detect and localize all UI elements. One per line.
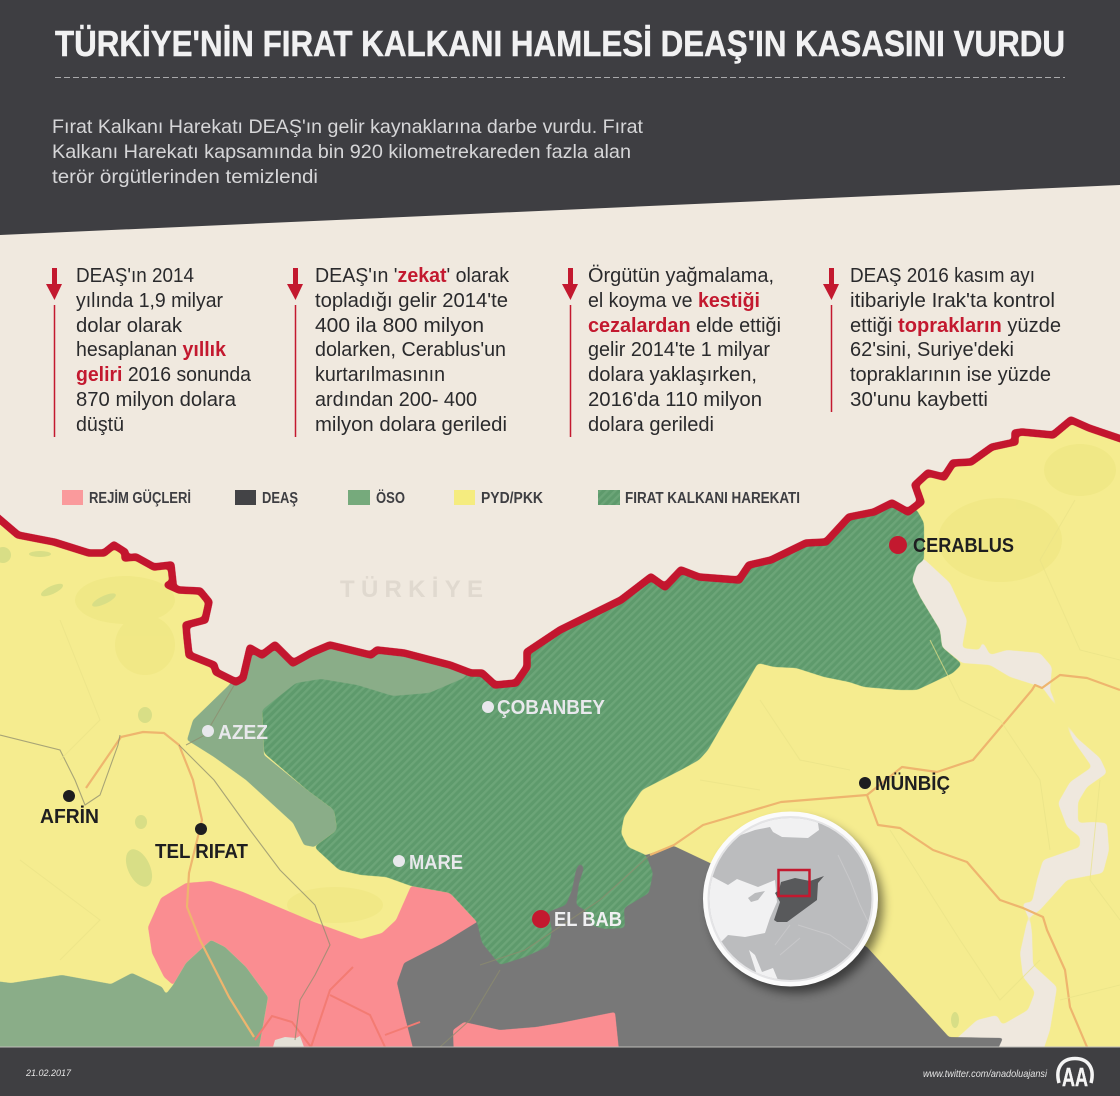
region: regime forces pink, south [453,1012,620,1060]
label: Türkiye: TÜRKİYE [340,576,483,603]
borders [775,855,868,955]
text block: itibariyle Irak'ta kontrol [850,290,1055,312]
text block [76,265,252,436]
city: El Bab: EL BAB [554,909,622,931]
text block: dolara geriledi [588,414,714,436]
intro text: terör örgütlerinden temizlendi [52,166,318,188]
text block: el koyma ve kestiği [588,290,760,312]
terrain tints [75,444,1116,923]
roads [86,675,1120,1047]
text block: cezalardan elde ettiği [588,315,781,337]
intro text: Fırat Kalkanı Harekatı DEAŞ'ın gelir kaynaklarına darbe vurdu. Fırat [52,116,644,138]
source url: www.twitter.com/anadoluajansi [923,1068,1048,1080]
road inside regime area [255,967,420,1047]
column 1: annual income [46,265,252,437]
text block: Örgütün yağmalama, [588,265,774,287]
text block: hesaplanan yıllık [76,339,227,361]
intro text [52,116,644,188]
legend: ÖSO: ÖSO [376,488,405,507]
region: Euphrates Shield hatched [262,498,962,965]
Syria-Türkiye border [0,420,1120,685]
column 2: zekat [287,265,510,437]
city: Afrin [40,790,99,828]
Black Sea [741,818,819,838]
legend: DEAŞ [235,490,298,507]
text block: dolar olarak [76,315,183,337]
text block: topladığı gelir 2014'te [315,290,508,312]
text block: 2016'da 110 milyon [588,389,762,411]
map: territory control [0,420,1120,1060]
logo: Anadolu Agency: AA [1062,1062,1088,1092]
icon: down arrow [823,268,839,300]
city: Afrin: AFRİN [40,805,99,828]
text block [850,265,1061,411]
Mediterranean Sea [710,877,777,941]
city: Mare: MARE [409,852,463,874]
text block: yılında 1,9 milyar [76,290,223,312]
text block: kurtarılmasının [315,364,445,386]
faint local roads [20,500,1120,1000]
text block: 870 milyon dolara [76,389,237,411]
text block: DEAŞ 2016 kasım ayı [850,265,1035,287]
text block: gelir 2014'te 1 milyar [588,339,770,361]
city: Tel Rifat [155,823,248,863]
legend: regime forces [62,488,191,507]
text block: düştü [76,414,124,436]
text block: dolara yaklaşırken, [588,364,757,386]
text block: 400 ila 800 milyon [315,315,484,337]
vegetation patches [0,547,959,1028]
text block: DEAŞ'ın 2014 [76,265,194,287]
legend [62,488,800,507]
Syria [774,876,824,922]
locator inset map [690,805,883,993]
text block [588,265,781,436]
date: 21.02.2017 [25,1068,72,1079]
region: regime forces pink [148,881,500,1060]
text block: DEAŞ'ın 'zekat' olarak [315,265,510,287]
text block [315,265,510,436]
legend: ÖSO [348,488,405,507]
region: FSA green, north Azez [188,649,466,847]
river: Euphrates [912,558,1109,1060]
intro text: Kalkanı Harekatı kapsamında bin 920 kilometrekareden fazla alan [52,141,631,163]
city block: Aleppo [273,1036,304,1047]
text block: dolarken, Cerablus'un [315,339,506,361]
legend: PYD/PKK [454,490,543,507]
city: Tel Rifat: TEL RIFAT [155,841,248,863]
icon: down arrow [46,268,62,300]
text block: 30'unu kaybetti [850,389,988,411]
region: PYD/PKK yellow [0,420,1120,1047]
text block: ettiği toprakların yüzde [850,315,1061,337]
column 3: looting and fines [562,265,781,437]
text block: topraklarının ise yüzde [850,364,1051,386]
column 4: territory lost [823,265,1061,412]
footer bar [0,1047,1120,1096]
text block: 62'sini, Suriye'deki [850,339,1014,361]
legend: regime forces: REJİM GÜÇLERİ [89,488,191,507]
Cyprus [748,891,765,902]
legend: DEAŞ: DEAŞ [262,490,298,507]
icon: down arrow [562,268,578,300]
logo: Anadolu Agency [1058,1058,1092,1092]
city: Münbiç: MÜNBİÇ [875,772,950,795]
header band [0,0,1120,235]
text block: ardından 200- 400 [315,389,477,411]
city: Cerablus: CERABLUS [913,535,1014,557]
red locator box [778,870,810,896]
city: Azez: AZEZ [218,722,268,744]
region: FSA green, south-west [0,940,268,1060]
thin grey tracks [0,682,650,1047]
region: DEAŞ grey [397,846,1003,1060]
legend: Euphrates Shield: FIRAT KALKANI HAREKATI [625,490,800,507]
legend: PYD/PKK: PYD/PKK [481,490,543,507]
city: Çobanbey: ÇOBANBEY [497,697,606,719]
text block: milyon dolara geriledi [315,414,507,436]
icon: down arrow [287,268,303,300]
text block: geliri 2016 sonunda [76,364,252,386]
Red Sea gulfs [749,950,778,979]
